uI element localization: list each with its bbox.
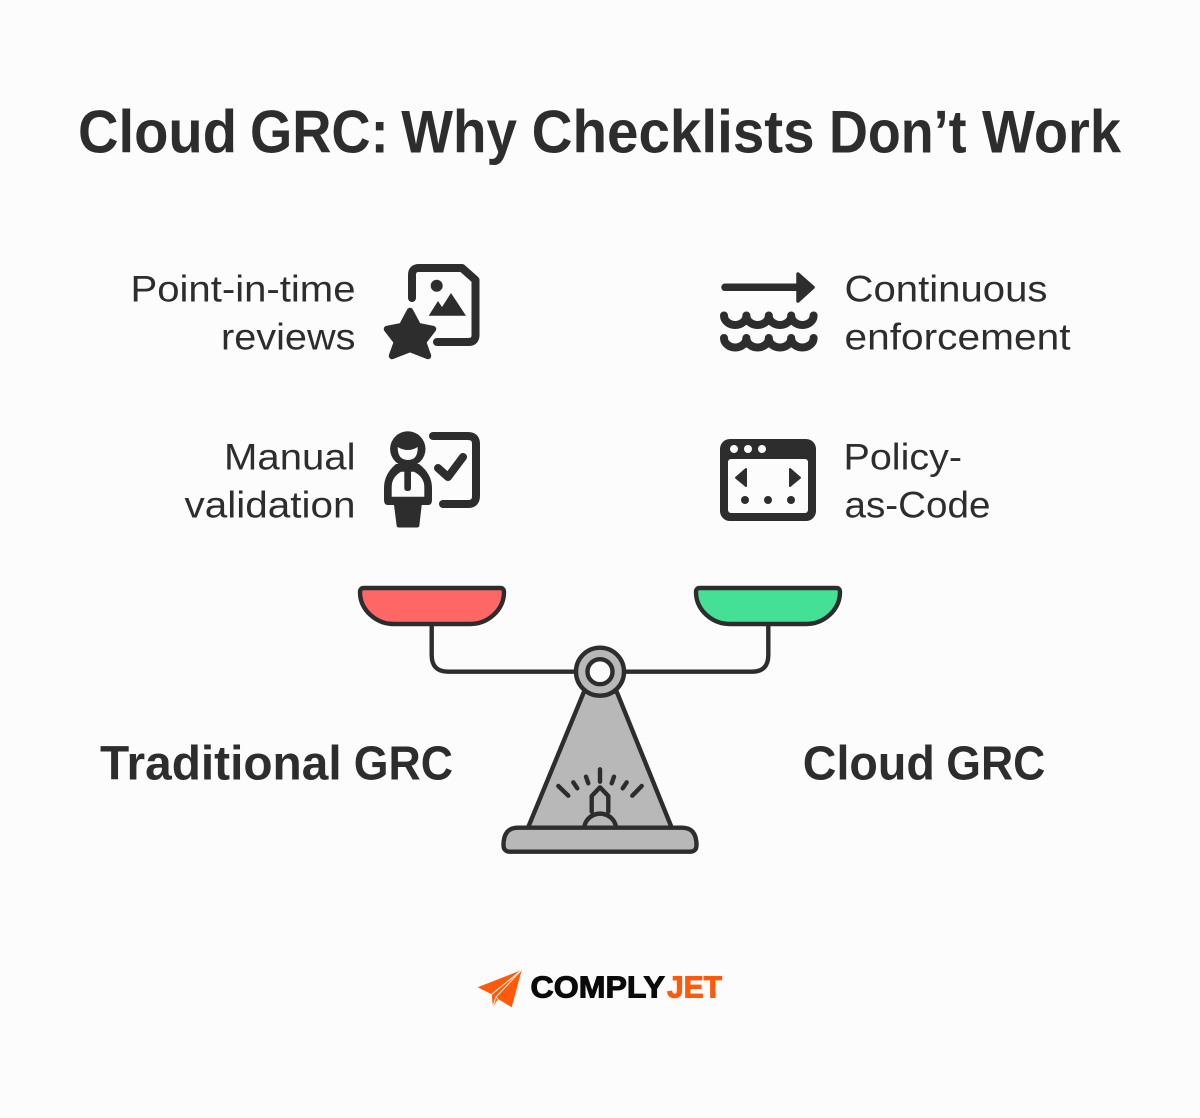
title: Don’t <box>829 99 967 166</box>
scale stand <box>528 692 672 828</box>
text: continuous enforcement <box>844 269 1071 357</box>
text: manual validation: Manual <box>224 436 356 477</box>
gauge dial <box>558 769 642 827</box>
text: manual validation <box>184 436 356 525</box>
green pan <box>696 588 840 624</box>
text: continuous enforcement: Continuous <box>844 269 1048 310</box>
text: policy-as-code <box>844 436 990 525</box>
pivot ring <box>576 648 624 696</box>
icon: arrow over waves <box>724 274 814 348</box>
title: GRC: <box>250 99 389 166</box>
icon: person with checkmark <box>384 431 476 528</box>
title: Why <box>401 99 518 166</box>
text: manual validation: validation <box>184 484 356 525</box>
logo: complyjet <box>478 970 722 1007</box>
text: policy-as-code: Policy- <box>844 436 962 477</box>
scale beam <box>432 624 768 672</box>
title <box>78 99 1122 166</box>
label: traditional grc: GRC <box>354 738 453 790</box>
text: point-in-time reviews: reviews <box>221 316 356 357</box>
text: point-in-time reviews <box>130 269 356 357</box>
text: continuous enforcement: enforcement <box>844 316 1071 357</box>
text: point-in-time reviews: Point-in-time <box>130 269 356 310</box>
icon: image document with star <box>387 268 476 356</box>
label: cloud grc <box>803 738 1045 790</box>
text: policy-as-code: as-Code <box>844 484 990 525</box>
red pan <box>360 588 504 624</box>
title: Work <box>982 99 1122 166</box>
label: cloud grc: Cloud <box>803 738 935 790</box>
logo: complyjet: JET <box>667 970 722 1004</box>
scale base <box>504 828 696 852</box>
icon: code window <box>720 439 816 521</box>
balance scale <box>360 588 840 852</box>
title: Checklists <box>532 99 815 166</box>
label: cloud grc: GRC <box>946 738 1045 790</box>
icon: paper plane <box>478 970 522 1007</box>
logo: complyjet: COMPLY <box>530 970 665 1004</box>
label: traditional grc <box>100 738 453 790</box>
label: traditional grc: Traditional <box>100 738 342 790</box>
title: Cloud <box>78 99 237 166</box>
